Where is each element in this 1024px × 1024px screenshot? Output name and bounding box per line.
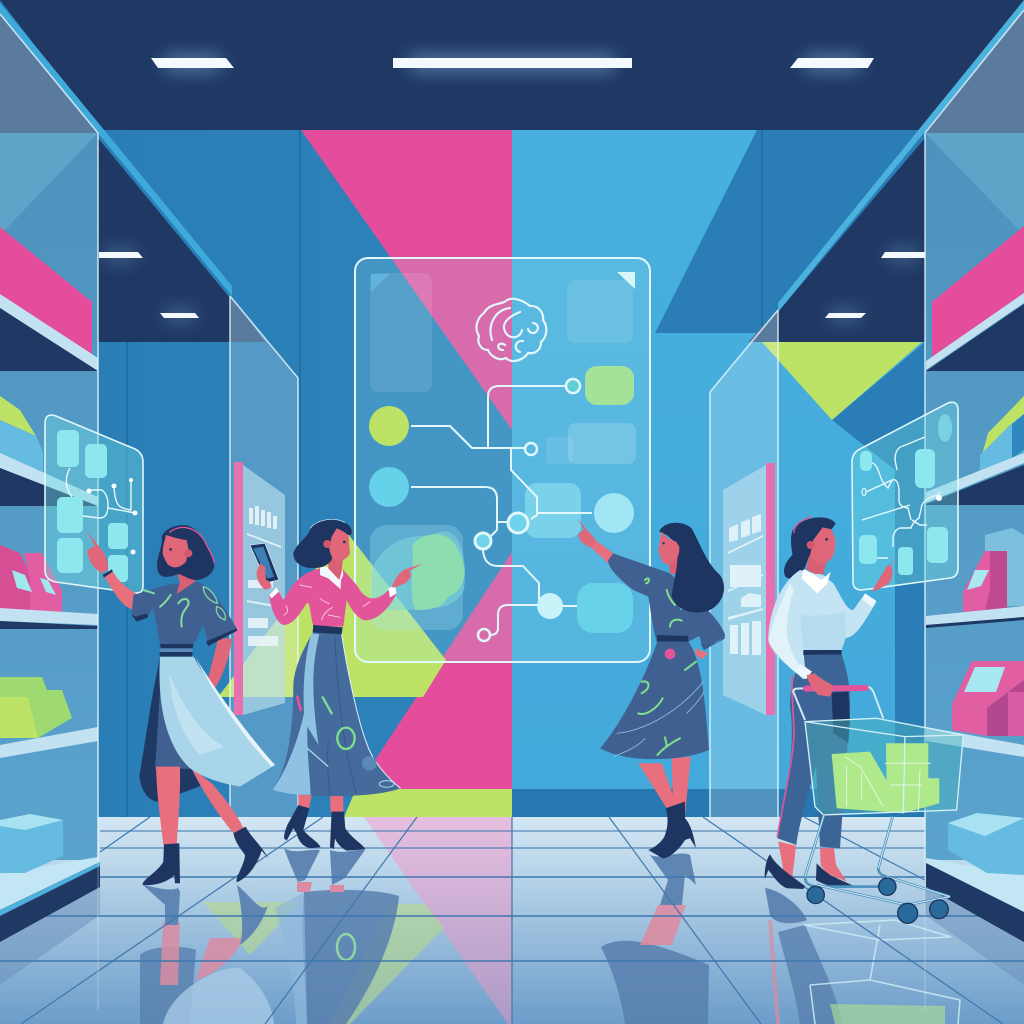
third shelf board xyxy=(0,608,98,625)
circuit traces xyxy=(411,386,592,635)
digital sign: right xyxy=(723,463,775,715)
wall colour block: green ceiling triangle xyxy=(762,342,922,420)
big pink box xyxy=(952,661,1024,736)
shopper: woman with tablet xyxy=(250,519,423,851)
lower shelf base xyxy=(926,813,1024,942)
left aisle shelving xyxy=(0,14,100,942)
icon: brain xyxy=(477,299,546,361)
digital sign: left xyxy=(234,462,285,715)
wall colour block: pink lower triangle xyxy=(356,552,512,789)
reflection: second shopper xyxy=(275,848,399,1024)
floor tile lines xyxy=(0,817,1024,1024)
panel frame xyxy=(355,258,650,662)
central holographic panel xyxy=(355,258,650,662)
shopping cart with green boxes xyxy=(793,673,963,923)
upper shelf board xyxy=(0,294,98,372)
pink boxes on third shelf xyxy=(0,545,62,612)
floor xyxy=(0,817,1024,1024)
reflection: cart xyxy=(804,920,960,1024)
fourth shelf board xyxy=(0,727,98,758)
reflection: first shopper xyxy=(140,885,274,1024)
third shelf board xyxy=(926,606,1024,625)
right aisle shelving xyxy=(925,10,1024,942)
right side ceiling section xyxy=(778,138,925,342)
wall colour block: pink upper triangle xyxy=(301,130,512,430)
shopper: woman pointing at left hologram xyxy=(87,525,275,885)
left floating hologram xyxy=(45,415,143,593)
ceiling lights xyxy=(151,55,874,71)
soft content tiles xyxy=(369,272,636,633)
back wall xyxy=(0,130,932,817)
second shelf xyxy=(0,396,98,507)
pink upper block xyxy=(932,226,1024,357)
ceiling xyxy=(0,0,1024,130)
pink upper shelf block xyxy=(0,227,92,356)
left side ceiling section xyxy=(98,138,230,342)
second shelf xyxy=(926,396,1024,505)
reflection: fourth shopper xyxy=(765,888,843,1024)
shopper: woman in white shirt xyxy=(765,517,900,889)
shopper: woman in dress pointing at central panel xyxy=(577,518,725,858)
boxes on third shelf xyxy=(963,528,1024,612)
ceiling edge strips xyxy=(0,0,1024,312)
green boxes on fourth shelf xyxy=(0,677,72,738)
right floating hologram xyxy=(852,402,958,590)
floor reflections of shoppers xyxy=(140,848,960,1024)
reflection: third shopper xyxy=(601,854,709,1024)
wall colour block: green triangle behind shopper xyxy=(218,530,446,697)
lower shelf base xyxy=(0,814,100,942)
fourth shelf board xyxy=(926,727,1024,757)
wall colour block: green band xyxy=(344,789,512,817)
upper shelf board xyxy=(926,293,1024,370)
circuit nodes xyxy=(475,379,580,641)
